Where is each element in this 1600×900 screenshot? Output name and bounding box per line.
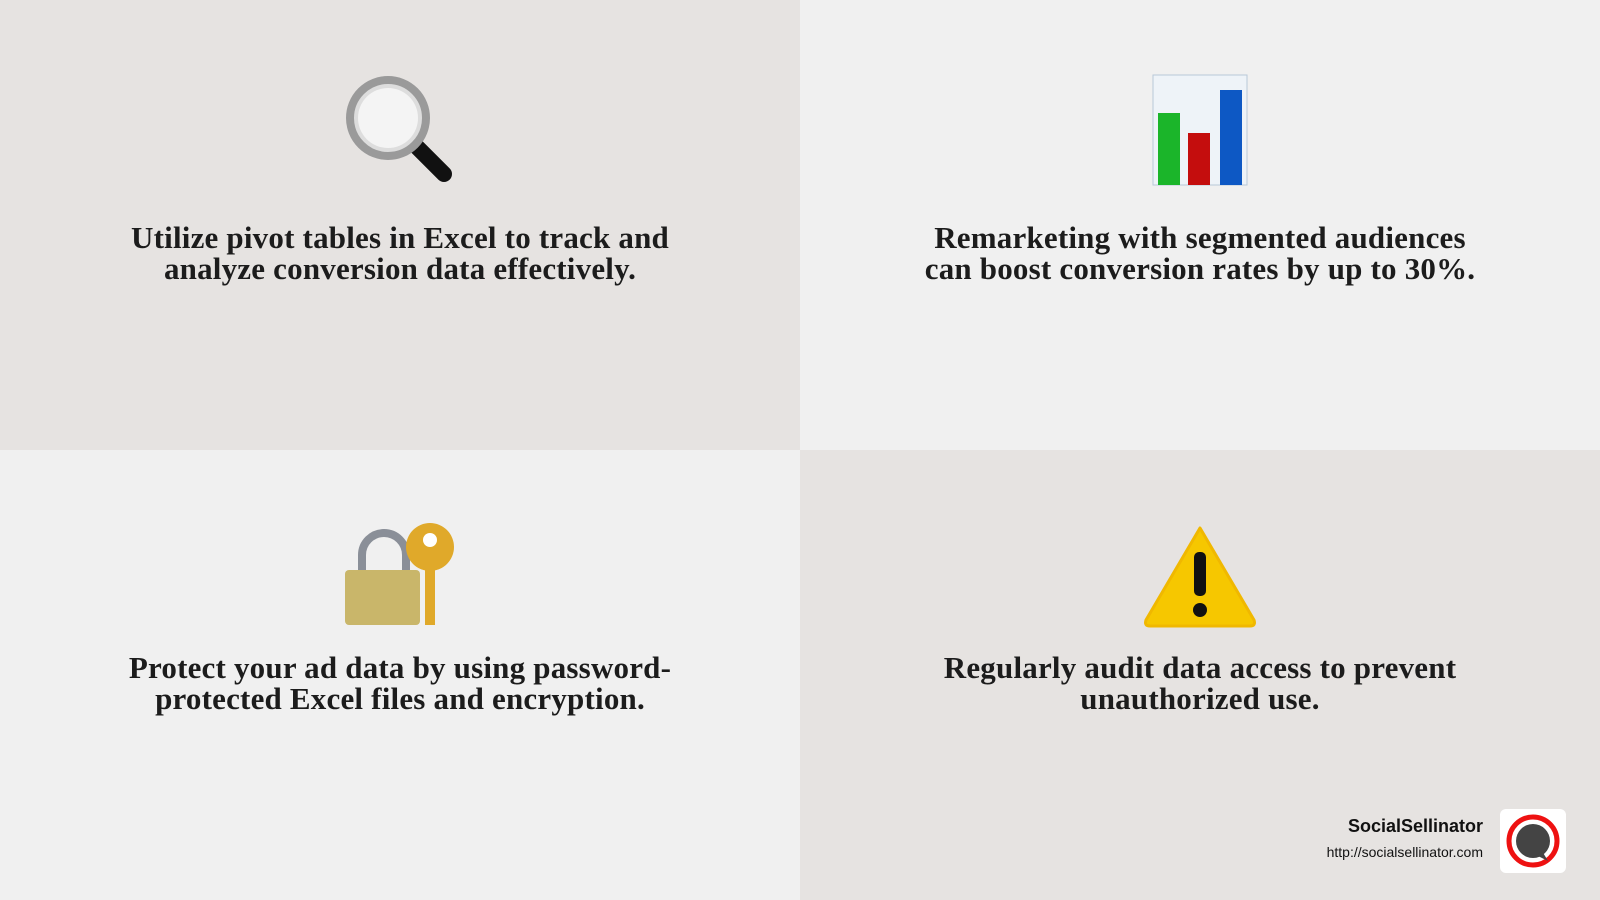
text: protect data: protected Excel files and encryption. <box>155 681 645 716</box>
text: audit: Regularly audit data access to prevent <box>944 650 1456 685</box>
logo <box>1500 809 1566 873</box>
text: pivot tables: analyze conversion data effectively. <box>164 251 636 286</box>
icon: bar chart <box>1152 74 1248 186</box>
text: remarketing: can boost conversion rates by up to 30%. <box>925 251 1475 286</box>
icon: magnifying glass <box>346 76 452 182</box>
branding <box>1327 809 1566 873</box>
text: remarketing <box>925 220 1475 286</box>
panel: audit <box>800 450 1600 900</box>
panel: remarketing <box>800 0 1600 450</box>
text: pivot tables: Utilize pivot tables in Excel to track and <box>131 220 669 255</box>
icon: lock and key <box>345 523 454 625</box>
text: audit: unauthorized use. <box>1080 681 1320 716</box>
brand url: http://socialsellinator.com <box>1327 844 1483 860</box>
text: protect data: Protect your ad data by using password- <box>129 650 671 685</box>
text: protect data <box>129 650 671 716</box>
panel: pivot tables <box>0 0 800 450</box>
text: audit <box>944 650 1456 716</box>
panel: protect data <box>0 450 800 900</box>
text: pivot tables <box>131 220 669 286</box>
brand name: SocialSellinator <box>1348 816 1483 836</box>
text: remarketing: Remarketing with segmented audiences <box>934 220 1466 255</box>
icon: warning <box>1144 526 1256 628</box>
